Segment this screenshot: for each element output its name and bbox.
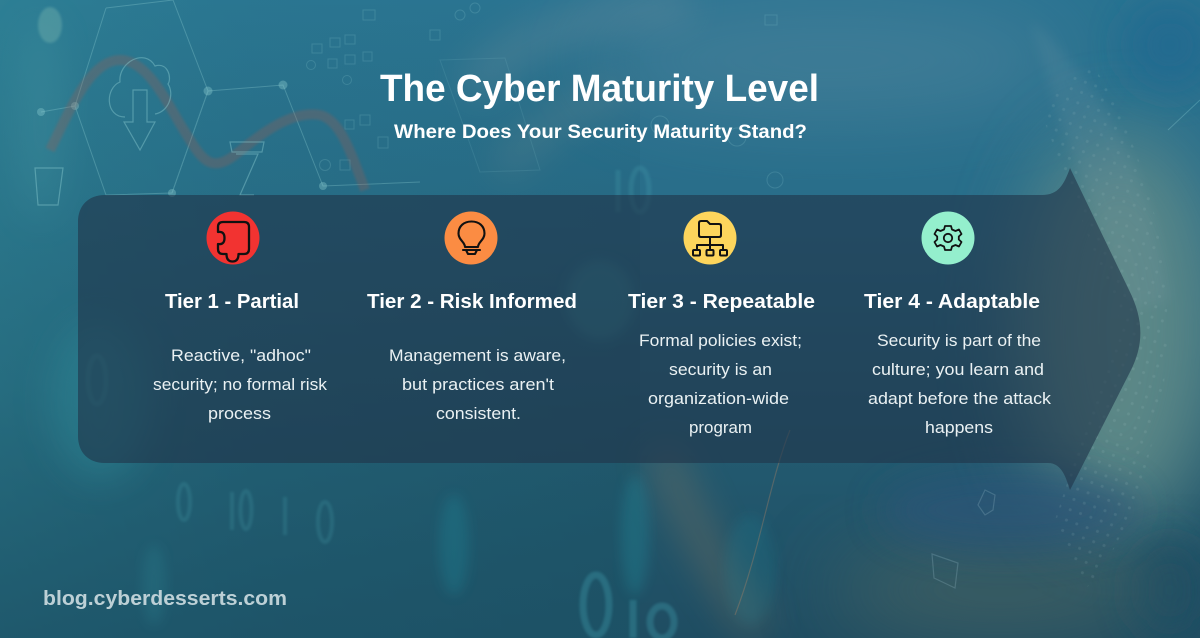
- icon: folder hierarchy: [684, 212, 736, 264]
- text: tier 1 description: process: [208, 404, 271, 423]
- text: tier 2 description: [389, 346, 566, 423]
- text: tier 4 description: adapt before the attack: [868, 389, 1052, 408]
- subtitle: Where Does Your Security Maturity Stand?: [394, 122, 807, 143]
- text: tier 3 description: Formal policies exist;: [639, 331, 802, 350]
- icon: light bulb: [444, 212, 498, 264]
- hexagon network lines: [41, 0, 1200, 195]
- text: tier 2 description: but practices aren't: [402, 375, 554, 394]
- text: tier 3 description: program: [689, 418, 752, 437]
- heading: tier 2: Tier 2 - Risk Informed: [367, 291, 577, 313]
- cloud download icon in background: [35, 58, 264, 205]
- heading: tier 3: Tier 3 - Repeatable: [628, 291, 815, 313]
- small tech glyphs: [306, 3, 783, 188]
- title: The Cyber Maturity Level: [380, 68, 819, 110]
- text: tier 1 description: security; no formal risk: [153, 375, 328, 394]
- text: tier 4 description: happens: [925, 418, 993, 437]
- text: tier 2 description: Management is aware,: [389, 346, 566, 365]
- panel: tier 2: [367, 212, 577, 423]
- icon: puzzle piece: [206, 212, 260, 264]
- footer url: blog.cyberdesserts.com: [43, 588, 287, 610]
- text: tier 4 description: [868, 331, 1052, 437]
- text: tier 1 description: [153, 346, 328, 423]
- text: tier 3 description: organization-wide: [648, 389, 789, 408]
- text: tier 3 description: [639, 331, 802, 437]
- panel: tier 4: [864, 212, 1052, 437]
- icon: gear: [922, 212, 974, 264]
- text: tier 1 description: Reactive, "adhoc": [171, 346, 311, 365]
- panel: tier 1: [153, 212, 328, 423]
- heading: tier 1: Tier 1 - Partial: [165, 291, 299, 313]
- text: tier 4 description: culture; you learn and: [872, 360, 1044, 379]
- binary digits: [88, 168, 649, 542]
- heading: tier 4: Tier 4 - Adaptable: [864, 291, 1040, 313]
- panel: arrow banner: [78, 168, 1140, 490]
- text: tier 3 description: security is an: [669, 360, 772, 379]
- text: tier 4 description: Security is part of the: [877, 331, 1041, 350]
- panel: tier 3: [628, 212, 815, 437]
- red trend line: [50, 60, 365, 190]
- text: tier 2 description: consistent.: [436, 404, 521, 423]
